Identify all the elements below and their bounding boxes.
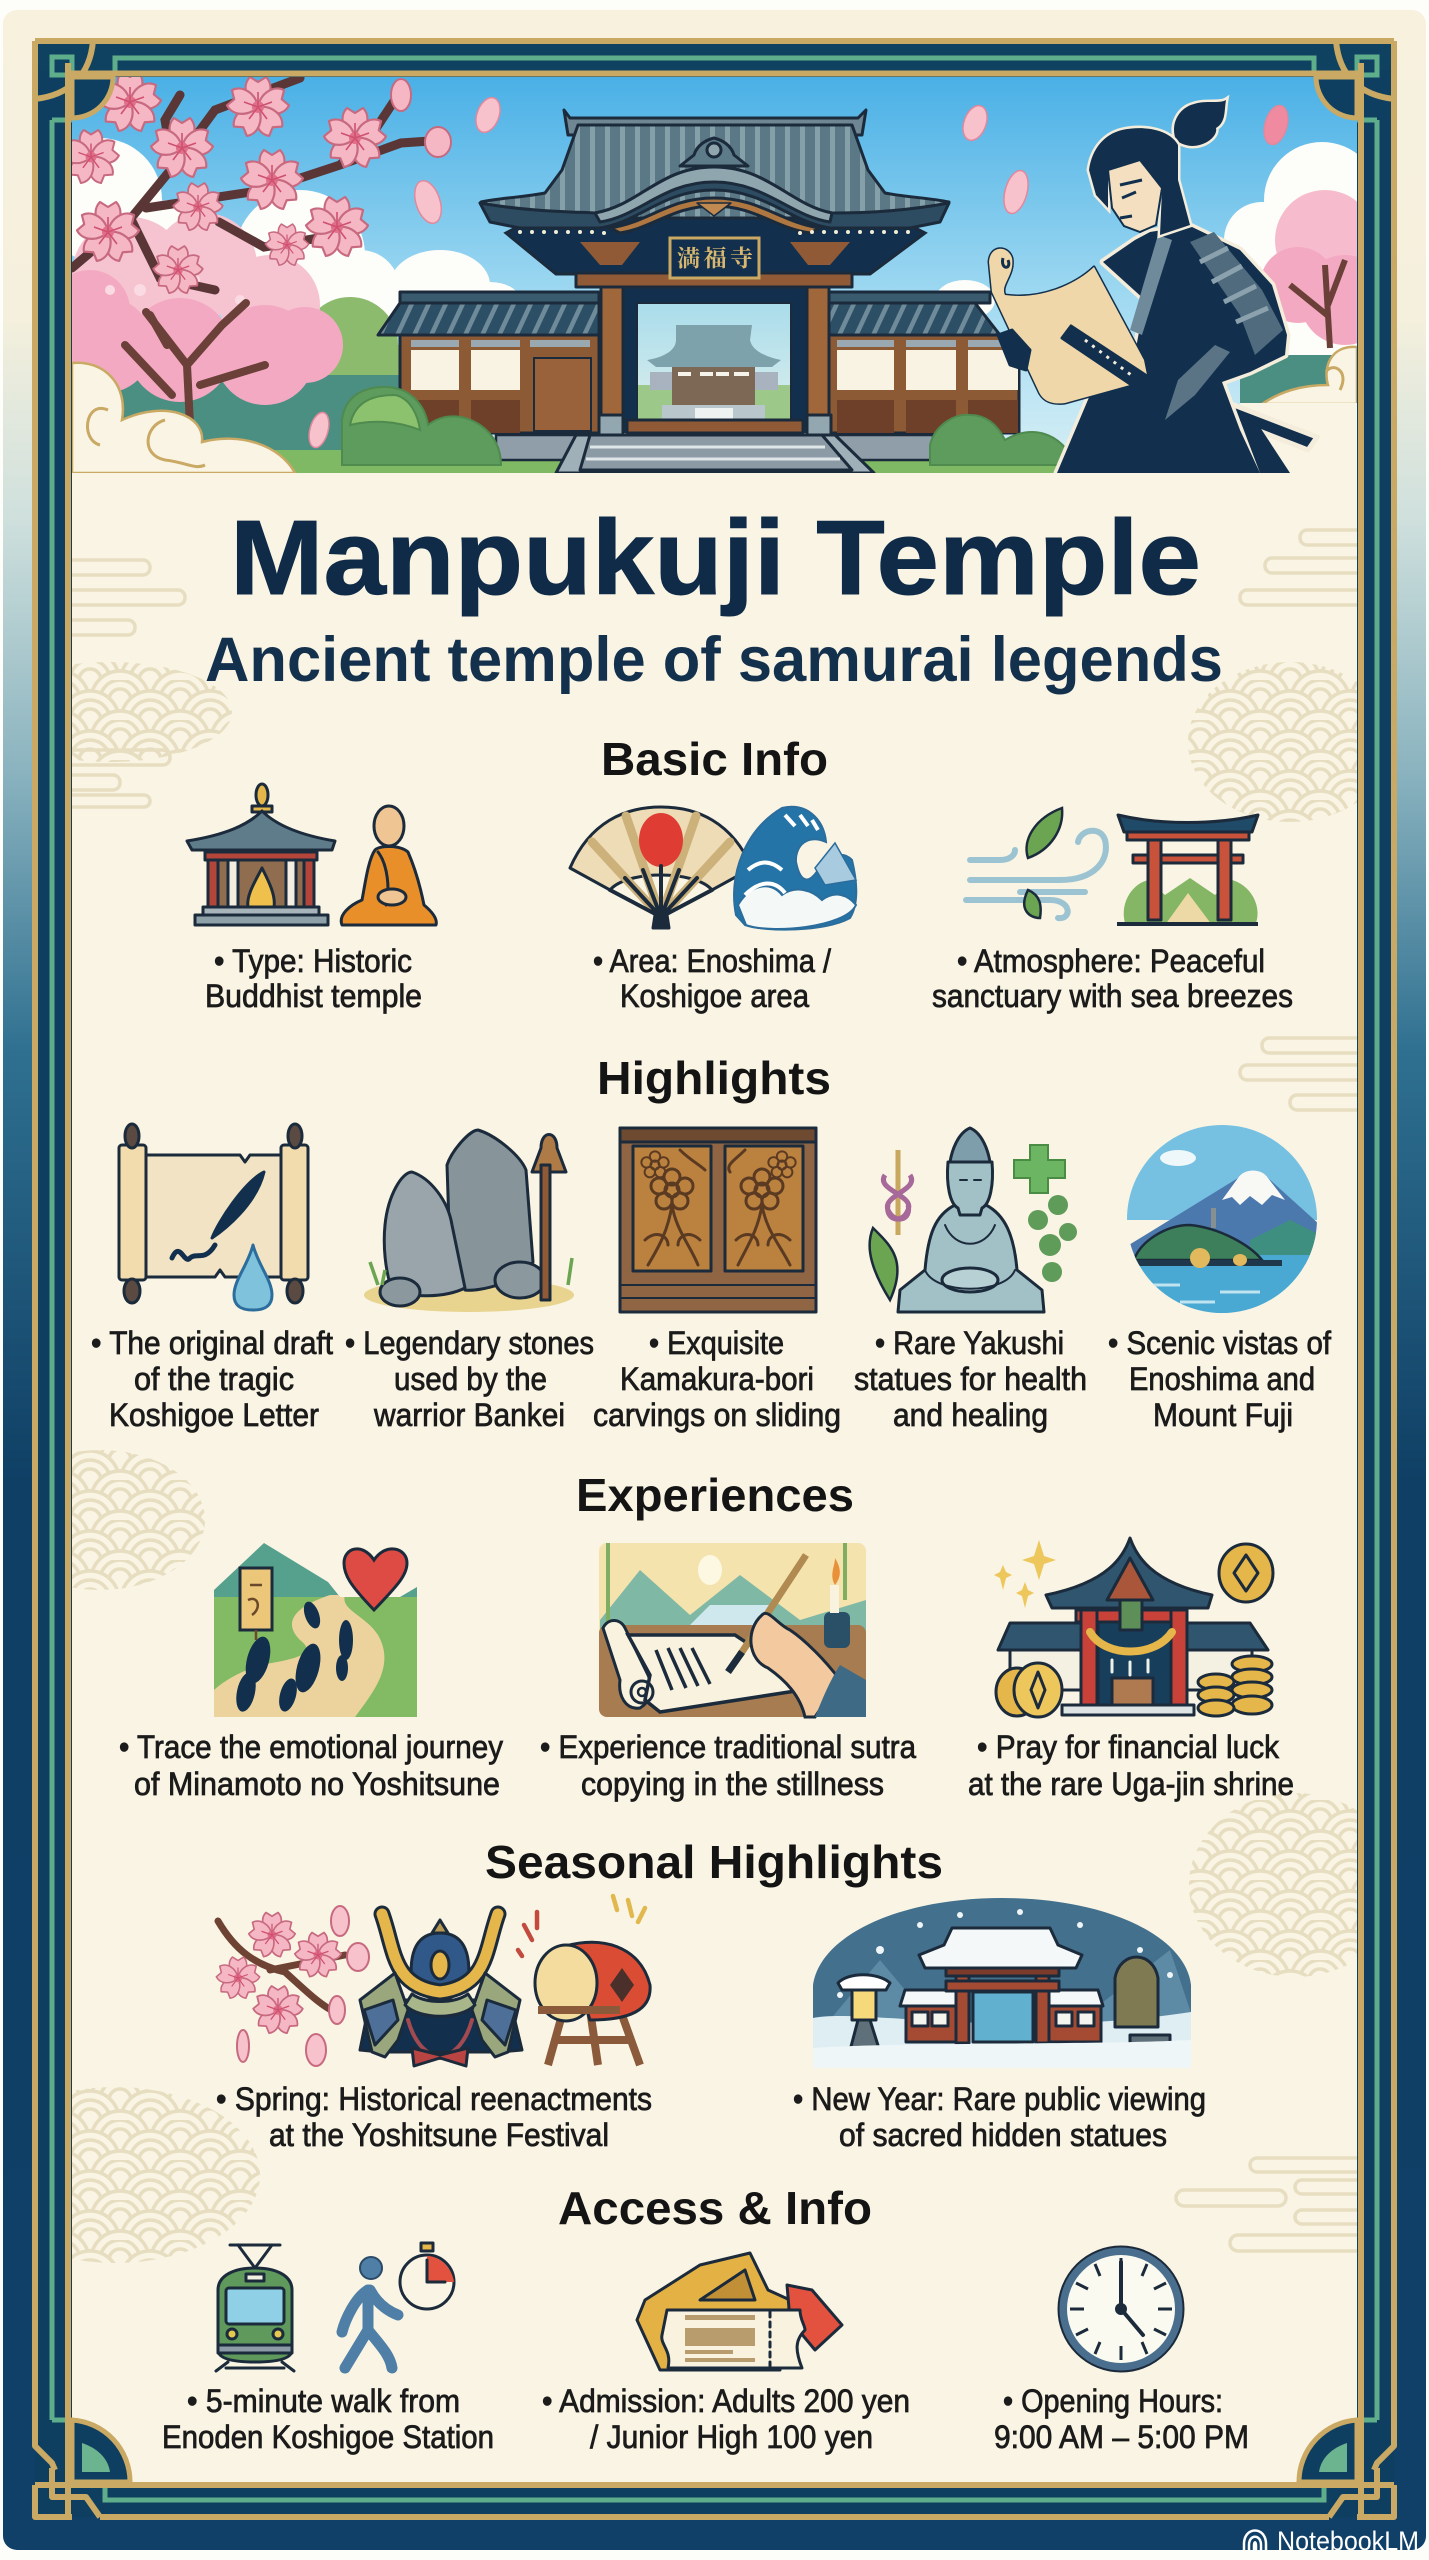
central steps [556,435,874,473]
text: spring: • Spring: Historical reenactments [216,2081,652,2117]
text: atmosphere: sanctuary with sea breezes [932,978,1293,1014]
text: new year: of sacred hidden statues [839,2117,1167,2153]
heading: highlights: Highlights [597,1052,831,1104]
samurai [1057,100,1317,473]
text: area: • Area: Enoshima / [593,943,831,979]
section: highlights [91,1052,1331,1433]
text: atmosphere: • Atmosphere: Peaceful [957,943,1265,979]
text: trace: • Trace the emotional journey [119,1729,503,1765]
side wings [378,292,1019,433]
left cherry tree [50,72,451,425]
section: basic info [187,733,1293,1014]
text: hours [994,2383,1249,2455]
text: pray: at the rare Uga-jin shrine [968,1766,1294,1802]
great wave [734,807,856,930]
pillars [576,273,852,435]
text: stones: warrior Bankei [373,1397,565,1433]
subtitle: Ancient temple of samurai legends [205,625,1223,695]
armor [1190,232,1283,355]
text: carvings [593,1325,841,1433]
text: stones [345,1325,594,1433]
icon: journey map [214,1543,417,1717]
icon: koshigoe letter scroll [119,1124,308,1310]
icon: stopwatch [400,2243,454,2309]
text: hours: • Opening Hours: [1003,2383,1223,2419]
heading: experiences: Experiences [576,1469,854,1521]
icon: taiko drum [518,1896,650,2065]
text: sutra: • Experience traditional sutra [540,1729,916,1765]
icon: carved doors [620,1128,816,1312]
bushes [342,387,1076,465]
icon: snowy new year temple [813,1898,1200,2068]
text: stones: used by the [394,1361,547,1397]
text: vistas: Mount Fuji [1153,1397,1293,1433]
text: spring [216,2081,652,2153]
text: koshigoe letter [91,1325,333,1433]
text: area: Koshigoe area [620,978,809,1014]
icon: spring blossoms [215,1906,369,2066]
text: atmosphere [932,943,1293,1014]
text: sutra [540,1729,916,1802]
steps side platforms [496,435,933,460]
icon: enoshima and fuji [1120,1120,1320,1315]
text: trace: of Minamoto no Yoshitsune [134,1766,500,1802]
text: carvings: carvings on sliding [593,1397,841,1433]
ground [270,450,1060,473]
temple [378,110,1019,473]
right cherry tree [1263,190,1357,348]
text: yakushi: • Rare Yakushi [875,1325,1064,1361]
name plaque: 満福寺 [677,240,753,273]
cream cloud left [72,363,295,473]
text: hours: 9:00 AM – 5:00 PM [994,2419,1249,2455]
background ornaments: seigaiha waves and cloud lines [0,530,1401,2263]
text: type: • Type: Historic [214,943,412,979]
text: pray: • Pray for financial luck [977,1729,1280,1765]
text: koshigoe letter: • The original draft [91,1325,333,1361]
text: walk: Enoden Koshigoe Station [162,2419,494,2455]
text: yakushi: and healing [893,1397,1048,1433]
text: type: Buddhist temple [205,978,422,1014]
heading: basic info: Basic Info [601,733,828,785]
section: experiences [119,1469,1294,1802]
text: yakushi [854,1325,1087,1433]
icon: uga-jin shrine [994,1538,1273,1717]
text: sutra: copying in the stillness [581,1766,884,1802]
samurai face [1108,160,1162,232]
icon: ticket [637,2253,842,2370]
icon: clock [1058,2246,1184,2372]
text: new year [793,2081,1206,2153]
scroll [989,249,1150,403]
clouds [38,138,1380,360]
icon: pagoda and monk [187,784,436,925]
section: access and info [162,2182,1249,2455]
main roof [480,110,949,233]
hero illustration [38,72,1390,475]
text: carvings: • Exquisite [649,1325,784,1361]
text: stones: • Legendary stones [345,1325,594,1361]
cream cloud right [1240,347,1360,475]
section: seasonal highlights [215,1836,1206,2153]
icon: walking person [342,2257,398,2368]
text: pray [968,1729,1294,1802]
icon: yakushi buddha [870,1128,1077,1312]
icon: samurai helmet [360,1914,522,2066]
title: Manpukuji Temple [230,499,1201,617]
heading: seasonal highlights: Seasonal Highlights [485,1836,943,1888]
door view [637,303,791,420]
upper roof [1046,1538,1212,1608]
samurai body [1057,226,1287,473]
text: admission: • Admission: Adults 200 yen [542,2383,910,2419]
notebooklm watermark: NotebookLM [1277,2526,1419,2556]
text: vistas: • Scenic vistas of [1108,1325,1331,1361]
text: trace [119,1729,503,1802]
text: admission [542,2383,910,2455]
text: admission: / Junior High 100 yen [590,2419,873,2455]
text: spring: at the Yoshitsune Festival [269,2117,609,2153]
notebooklm watermark [1242,2529,1417,2550]
falling petals [306,94,1292,450]
text: walk [162,2383,494,2455]
icon: wind and torii [966,808,1258,925]
text: carvings: Kamakura-bori [620,1361,814,1397]
icon: sutra copying [599,1543,866,1717]
under-eave [503,220,928,276]
eave dots [518,230,910,235]
hills [120,297,1332,450]
text: area [593,943,831,1014]
text: vistas: Enoshima and [1129,1361,1315,1397]
icon: bankei stones [364,1130,574,1312]
icon: fan and wave [570,807,856,930]
text: new year: • New Year: Rare public viewing [793,2081,1206,2117]
text: type [205,943,422,1014]
text: koshigoe letter: Koshigoe Letter [109,1397,319,1433]
sword sheath [1233,402,1314,447]
text: yakushi: statues for health [854,1361,1087,1397]
brackets [580,242,850,265]
text: koshigoe letter: of the tragic [134,1361,294,1397]
icon: train [216,2245,294,2371]
samurai hair and topknot [1174,100,1226,146]
sky [72,77,1357,473]
text: walk: • 5-minute walk from [187,2383,460,2419]
side roofs [998,1623,1268,1650]
text: vistas [1108,1325,1331,1433]
heading: access and info: Access & Info [558,2182,872,2234]
